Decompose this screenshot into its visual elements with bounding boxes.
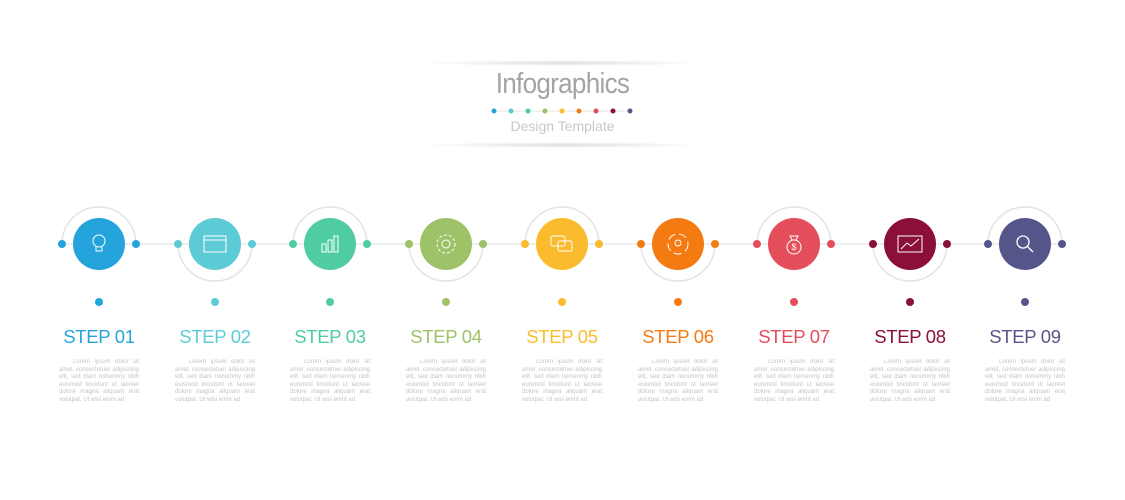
text: Lorem ipsum dolor sit amet, consectetuer adipiscing elit, sed diam nonummy nibh euismod tincidunt ut laoreet dolore magna aliquam erat volutpat. Ut wisi enim ad xyxy=(870,359,950,403)
text: STEP 07 xyxy=(758,326,830,347)
step 4 circle xyxy=(405,218,487,306)
title block xyxy=(456,61,670,148)
text: Lorem ipsum dolor sit amet, consectetuer adipiscing elit, sed diam nonummy nibh euismod tincidunt ut laoreet dolore magna aliquam erat volutpat. Ut wisi enim ad xyxy=(522,359,602,403)
step 8 circle xyxy=(869,218,951,306)
description texts xyxy=(59,359,1065,403)
text: STEP 05 xyxy=(526,326,598,347)
step labels xyxy=(63,326,1061,347)
step 6 circle xyxy=(637,218,719,306)
text: Lorem ipsum dolor sit amet, consectetuer adipiscing elit, sed diam nonummy nibh euismod tincidunt ut laoreet dolore magna aliquam erat volutpat. Ut wisi enim ad xyxy=(175,359,255,403)
text: STEP 02 xyxy=(179,326,251,347)
step 7 circle xyxy=(753,218,835,306)
timeline graphic xyxy=(58,206,1066,306)
text: STEP 09 xyxy=(989,326,1061,347)
text: Lorem ipsum dolor sit amet, consectetuer adipiscing elit, sed diam nonummy nibh euismod tincidunt ut laoreet dolore magna aliquam erat volutpat. Ut wisi enim ad xyxy=(59,359,139,403)
text: Lorem ipsum dolor sit amet, consectetuer adipiscing elit, sed diam nonummy nibh euismod tincidunt ut laoreet dolore magna aliquam erat volutpat. Ut wisi enim ad xyxy=(754,359,834,403)
step 1 circle xyxy=(58,218,140,306)
step 9 circle xyxy=(984,218,1066,306)
banner shadow bottom xyxy=(420,142,705,148)
step 3 circle xyxy=(289,218,371,306)
text: STEP 08 xyxy=(874,326,946,347)
subtitle: Design Template xyxy=(510,118,615,134)
step 7 circle: $ xyxy=(791,242,797,252)
title text: Infographics xyxy=(496,68,629,100)
colored dots row xyxy=(492,108,632,114)
text: STEP 06 xyxy=(642,326,714,347)
text: STEP 03 xyxy=(294,326,366,347)
text: STEP 04 xyxy=(410,326,482,347)
banner shadow top xyxy=(420,60,705,66)
text: Lorem ipsum dolor sit amet, consectetuer adipiscing elit, sed diam nonummy nibh euismod tincidunt ut laoreet dolore magna aliquam erat volutpat. Ut wisi enim ad xyxy=(985,359,1065,403)
text: STEP 01 xyxy=(63,326,135,347)
text: Lorem ipsum dolor sit amet, consectetuer adipiscing elit, sed diam nonummy nibh euismod tincidunt ut laoreet dolore magna aliquam erat volutpat. Ut wisi enim ad xyxy=(290,359,370,403)
text: Lorem ipsum dolor sit amet, consectetuer adipiscing elit, sed diam nonummy nibh euismod tincidunt ut laoreet dolore magna aliquam erat volutpat. Ut wisi enim ad xyxy=(406,359,486,403)
step 5 circle xyxy=(521,218,603,306)
text: Lorem ipsum dolor sit amet, consectetuer adipiscing elit, sed diam nonummy nibh euismod tincidunt ut laoreet dolore magna aliquam erat volutpat. Ut wisi enim ad xyxy=(638,359,718,403)
step 2 circle xyxy=(174,218,256,306)
